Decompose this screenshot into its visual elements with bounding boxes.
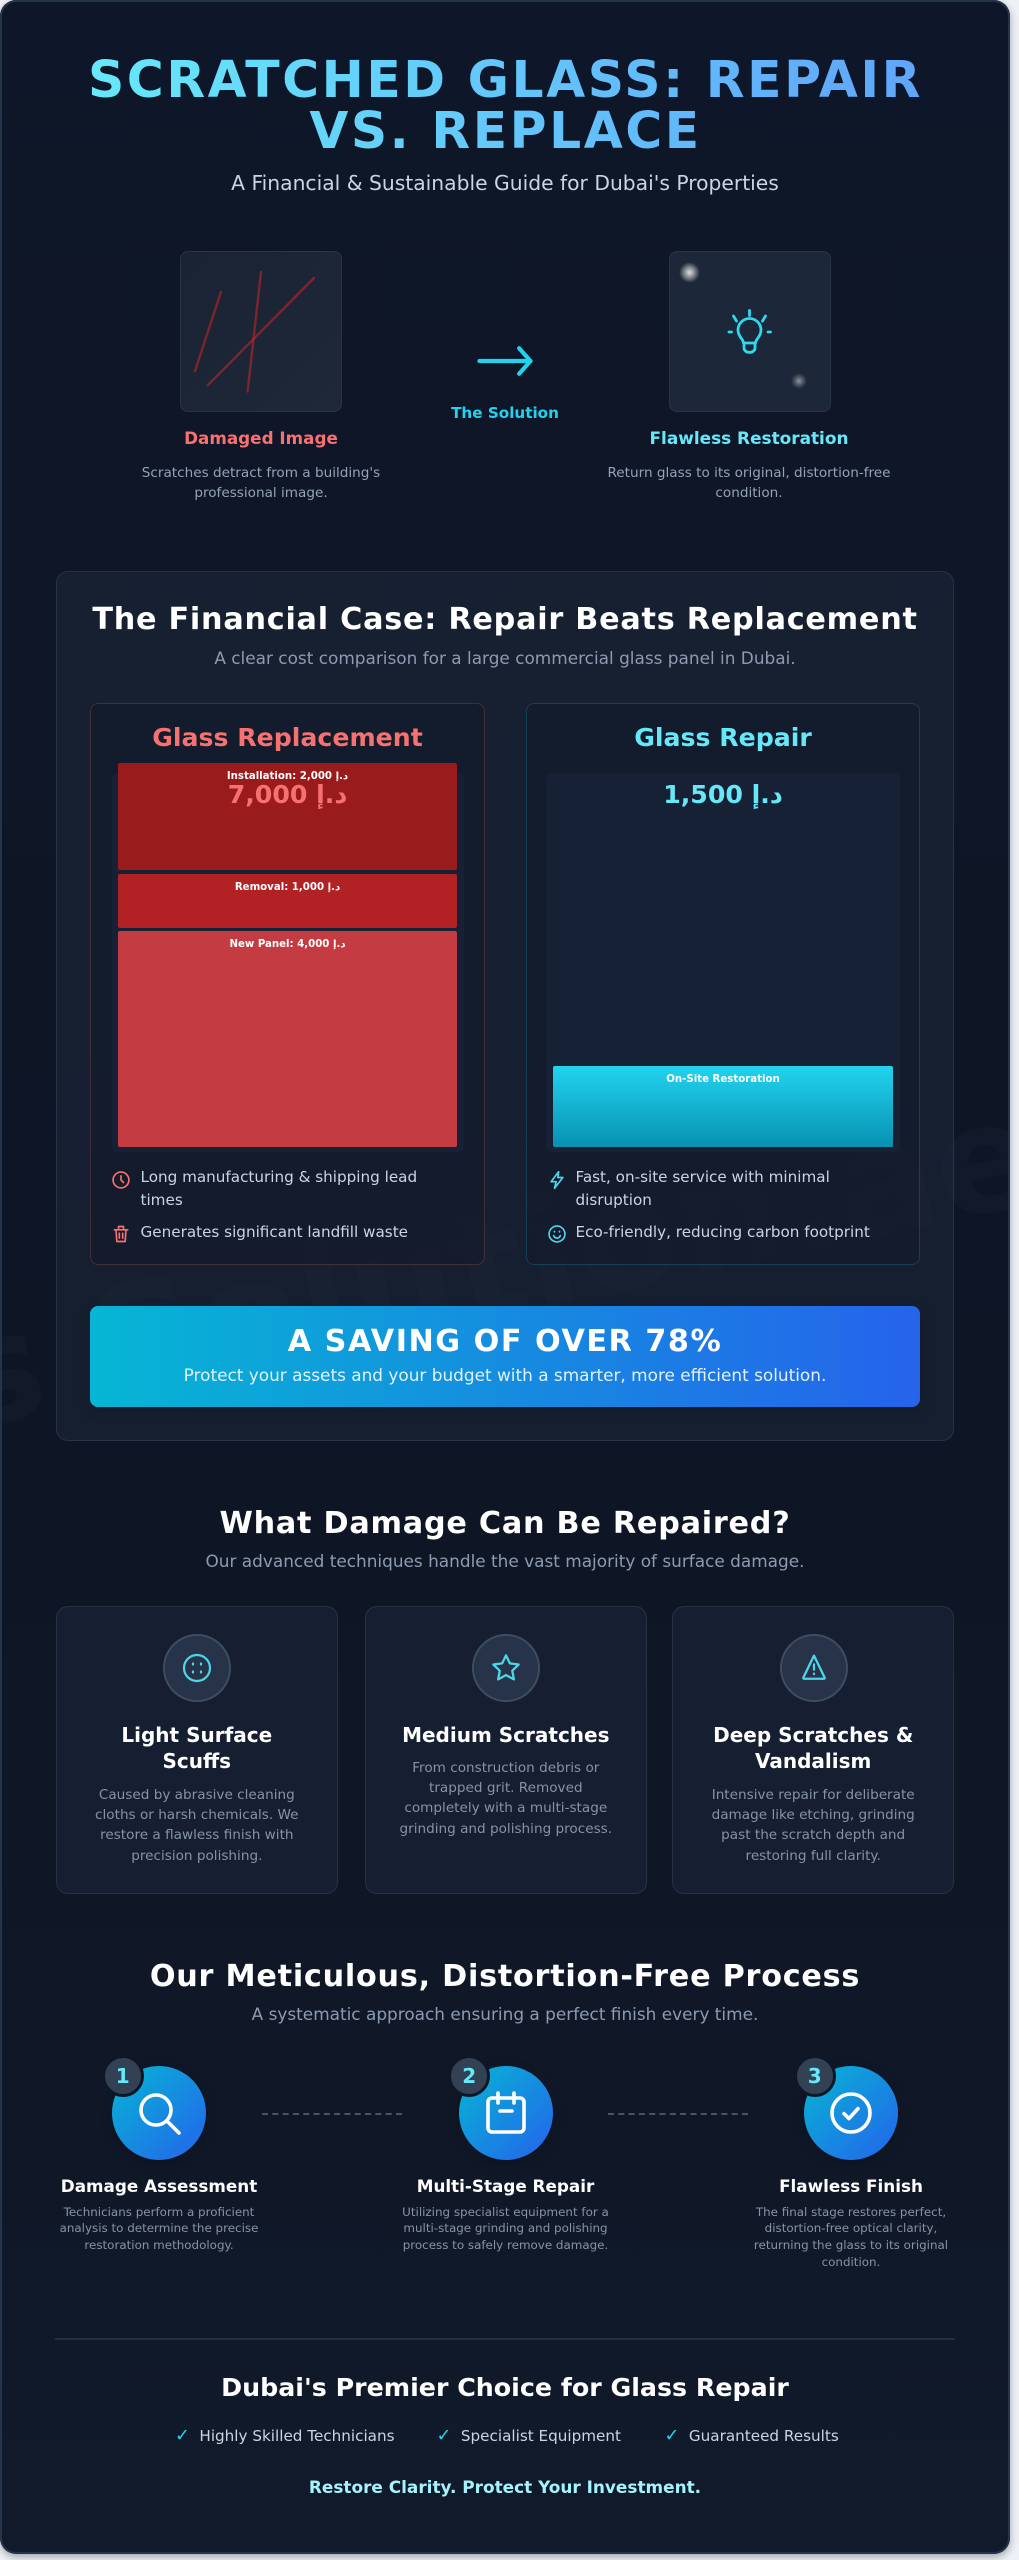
bar: removal: [118, 874, 457, 928]
small glint: [791, 373, 807, 389]
icon: trash: [114, 1226, 128, 1242]
header: [88, 50, 923, 195]
scuffs text: [95, 1787, 299, 1864]
damaged description: professional image.: [194, 485, 328, 501]
replacement total: 7,000 د.إ: [228, 780, 347, 809]
drawback: lead times: Long manufacturing & shipping lead: [140, 1168, 417, 1186]
damaged glass illustration: [180, 251, 342, 412]
step 2 text: Utilizing specialist equipment for a: [402, 2205, 609, 2219]
step 2 circle: [458, 2066, 552, 2160]
financial subheading: A clear cost comparison for a large commercial glass panel in Dubai.: [214, 648, 796, 668]
step 3 title: Flawless Finish: [779, 2176, 923, 2196]
scuffs text: restore a flawless finish with: [100, 1827, 294, 1843]
repair heading: Glass Repair: [634, 723, 812, 752]
savings headline: A SAVING OF OVER 78%: [288, 1324, 722, 1358]
chart: repair cost background: [546, 773, 900, 1152]
step 3 badge: [794, 2055, 836, 2097]
warning glyph: [802, 1654, 826, 1680]
chart: replacement cost stack: [112, 773, 464, 1152]
restored glass illustration: [669, 251, 831, 412]
damaged description: Scratches detract from a building's: [142, 465, 380, 481]
step 3 badge: 3: [808, 2064, 822, 2088]
repair total: 1,500 د.إ: [663, 780, 783, 809]
deep text: Intensive repair for deliberate: [712, 1787, 915, 1803]
step 2 title: Multi-Stage Repair: [417, 2176, 594, 2196]
scuffs text: cloths or harsh chemicals. We: [95, 1807, 299, 1823]
card: light surface scuffs: [56, 1606, 338, 1894]
restored heading: Flawless Restoration: [650, 428, 848, 448]
icon: magnifier: [139, 2093, 181, 2135]
step 1 circle: [112, 2066, 206, 2160]
deep text: restoring full clarity.: [746, 1848, 881, 1864]
scuff glyph: [182, 1654, 212, 1682]
icon: smile: [548, 1225, 566, 1243]
drawback: lead times: [140, 1168, 417, 1209]
connector 2: [608, 2113, 748, 2115]
glint: [678, 262, 700, 282]
medium text: completely with a multi-stage: [404, 1800, 607, 1816]
savings subtext: Protect your assets and your budget with a smarter, more efficient solution.: [184, 1365, 826, 1385]
icon: scuffs: [162, 1634, 230, 1702]
deep text: [712, 1787, 915, 1864]
financial heading: The Financial Case: Repair Beats Replacement: [92, 602, 918, 637]
check: results: ✓ Guaranteed Results: [664, 2426, 839, 2446]
scuffs title: Scuffs: [162, 1749, 231, 1773]
medium text: grinding and polishing process.: [400, 1821, 612, 1837]
footer title: Dubai's Premier Choice for Glass Repair: [221, 2373, 789, 2402]
step 1 text: analysis to determine the precise: [60, 2221, 258, 2235]
title: [88, 55, 923, 156]
subtitle: A Financial & Sustainable Guide for Dubai's Properties: [231, 171, 779, 195]
step 1 badge: 1: [116, 2064, 130, 2088]
step 3 text: [754, 2205, 948, 2269]
damage subheading: Our advanced techniques handle the vast majority of surface damage.: [205, 1551, 804, 1571]
restored description: [607, 465, 891, 501]
deep text: past the scratch depth and: [721, 1827, 905, 1843]
check: equipment: ✓ Specialist Equipment: [436, 2426, 621, 2446]
card: medium scratches: [365, 1606, 647, 1894]
step 1 title: Damage Assessment: [61, 2176, 257, 2196]
damage heading: What Damage Can Be Repaired?: [219, 1506, 790, 1541]
deep title: [713, 1723, 913, 1773]
star glyph: [492, 1654, 520, 1680]
drawback: landfill: Generates significant landfill waste: [140, 1222, 408, 1240]
icon: star: [472, 1634, 540, 1702]
restored description: Return glass to its original, distortion-free: [607, 465, 891, 481]
icon: bolt: [550, 1170, 564, 1190]
connector 1: [262, 2113, 402, 2115]
benefit: eco-friendly: Eco-friendly, reducing carbon footprint: [576, 1222, 870, 1240]
benefit: fast: disruption: [576, 1191, 652, 1209]
footer: [55, 2338, 955, 2503]
step 1 text: Technicians perform a proficient: [64, 2205, 254, 2219]
section heading: damage: [205, 1506, 804, 1571]
scuffs title: Light Surface: [121, 1723, 272, 1747]
deep title: Vandalism: [755, 1749, 871, 1773]
process step 1: [60, 2058, 258, 2252]
panel: financial case: [56, 571, 954, 1441]
icon: calendar: [486, 2091, 526, 2134]
card: glass replacement: [90, 703, 485, 1265]
step 3 text: condition.: [822, 2255, 880, 2269]
step 1 text: [60, 2205, 258, 2252]
hero: damaged image column: [142, 251, 380, 501]
step 3 circle: [804, 2066, 898, 2160]
step 3 text: returning the glass to its original: [754, 2238, 948, 2252]
hero: restored column: [607, 251, 891, 501]
icon: arrow: [477, 346, 533, 376]
bar: installation: [118, 763, 457, 870]
damaged heading: Damaged Image: [184, 428, 338, 448]
deep text: damage like etching, grinding: [712, 1807, 915, 1823]
icon: clock: [112, 1171, 130, 1189]
icon: light bulb: [728, 309, 772, 354]
icon: check circle: [830, 2092, 872, 2134]
scuffs title: [121, 1723, 272, 1773]
step 2 badge: 2: [462, 2064, 476, 2088]
drawback: lead times: times: [140, 1191, 183, 1209]
card: glass repair: [526, 703, 920, 1265]
savings banner: [90, 1306, 920, 1407]
medium text: From construction debris or: [412, 1760, 599, 1776]
benefit: fast: Fast, on-site service with minimal: [576, 1168, 830, 1186]
scratches: [194, 270, 316, 393]
medium text: trapped grit. Removed: [429, 1780, 583, 1796]
deep title: Deep Scratches &: [713, 1723, 913, 1747]
footer tagline: Restore Clarity. Protect Your Investment.: [309, 2476, 701, 2496]
new panel label: New Panel: 4,000 د.إ: [229, 939, 346, 950]
step 2 text: process to safely remove damage.: [403, 2238, 608, 2252]
footer checklist: [175, 2426, 839, 2446]
benefit: fast: [576, 1168, 830, 1209]
bar: on-site restoration: [553, 1066, 893, 1147]
medium title: Medium Scratches: [402, 1723, 610, 1747]
process step 2: [402, 2058, 609, 2252]
scuffs text: Caused by abrasive cleaning: [99, 1787, 295, 1803]
damaged description: [142, 465, 380, 501]
removal label: Removal: 1,000 د.إ: [235, 882, 340, 893]
replacement heading: Glass Replacement: [152, 723, 423, 752]
step 3 text: The final stage restores perfect,: [756, 2205, 946, 2219]
title: SCRATCHED GLASS: REPAIR: [88, 50, 923, 109]
card: deep scratches: [672, 1606, 954, 1894]
step 1 badge: [102, 2055, 144, 2097]
hero: arrow and label: [451, 346, 559, 422]
restored description: condition.: [715, 485, 783, 501]
check: technicians: ✓ Highly Skilled Technicians: [175, 2426, 395, 2446]
process subheading: A systematic approach ensuring a perfect finish every time.: [252, 2004, 758, 2024]
title: VS. REPLACE: [309, 101, 702, 160]
step 2 text: multi-stage grinding and polishing: [403, 2221, 608, 2235]
installation label: Installation: 2,000 د.إ: [227, 771, 348, 782]
step 2 text: [402, 2205, 609, 2252]
medium text: [400, 1760, 612, 1837]
step 3 text: distortion-free optical clarity,: [765, 2221, 937, 2235]
process step 3: [754, 2058, 948, 2269]
process heading: Our Meticulous, Distortion-Free Process: [150, 1959, 860, 1994]
section heading: process: [150, 1959, 860, 2024]
step 2 badge: [448, 2055, 490, 2097]
restoration label: On-Site Restoration: [666, 1074, 780, 1085]
solution label: The Solution: [451, 404, 559, 422]
icon: warning: [780, 1634, 848, 1702]
scuffs text: precision polishing.: [131, 1848, 262, 1864]
step 1 text: restoration methodology.: [84, 2238, 234, 2252]
bar: new panel: [118, 931, 457, 1147]
